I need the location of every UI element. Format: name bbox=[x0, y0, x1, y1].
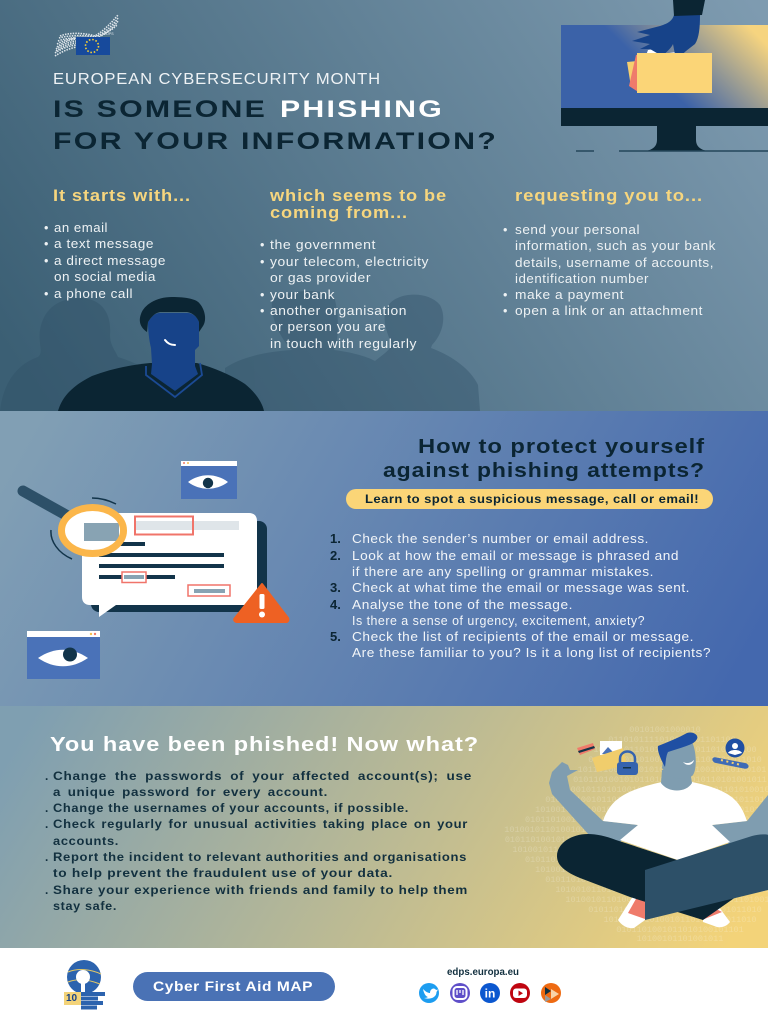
profile badge and password bbox=[713, 738, 748, 768]
list: requests: • bbox=[503, 304, 508, 318]
illustration: man in foreground bbox=[58, 297, 264, 411]
icon: linkedin: in bbox=[485, 986, 495, 1000]
list: what to do: . bbox=[45, 850, 49, 864]
list: channels: a text message bbox=[54, 237, 154, 251]
list: senders: your telecom, electricity bbox=[270, 255, 429, 269]
heading: how to protect: against phishing attempts? bbox=[383, 459, 705, 482]
list: requests: details, username of accounts, bbox=[515, 256, 714, 270]
list: requests: make a payment bbox=[515, 288, 624, 302]
list: channels: an email bbox=[54, 221, 108, 235]
list: what to do: . bbox=[45, 769, 49, 783]
numbered list: protection steps: Analyse the tone of the message. bbox=[352, 598, 573, 612]
icon: peertube bbox=[541, 983, 561, 1003]
icon: twitter bbox=[419, 983, 439, 1003]
arm right bbox=[712, 795, 768, 845]
decoration: binary cloud: 0110101111010010101101100 bbox=[608, 735, 736, 745]
decoration: binary cloud: 0101101001011010100101101001011010100101101001011 bbox=[525, 815, 768, 825]
icon: warning triangle bbox=[234, 584, 288, 622]
heading: how to protect: How to protect yourself bbox=[418, 435, 705, 458]
numbered list: protection steps bbox=[330, 531, 711, 660]
decoration: binary cloud: 0101101001011010100101101 bbox=[616, 925, 744, 935]
list: what to do: . bbox=[45, 817, 49, 831]
panel: header background bbox=[0, 0, 768, 411]
list: requests: send your personal bbox=[515, 223, 640, 237]
list: requests bbox=[503, 223, 716, 318]
heading: month: EUROPEAN CYBERSECURITY MONTH bbox=[53, 71, 381, 88]
icon: linkedin bbox=[480, 983, 500, 1003]
numbered list: protection steps: Are these familiar to you? Is it a long list of recipients? bbox=[352, 646, 711, 660]
decoration: binary cloud bbox=[504, 725, 768, 944]
panel: you have been phished background bbox=[0, 706, 768, 948]
list: senders: the government bbox=[270, 238, 376, 252]
column: which seems to be bbox=[260, 187, 447, 351]
decoration: binary cloud: 1011010010110101001011010010110100101 bbox=[578, 765, 766, 775]
list: senders: or gas provider bbox=[270, 271, 371, 285]
shoes bbox=[618, 898, 645, 928]
list: what to do: to help prevent the fraudulent use of your data. bbox=[53, 866, 393, 880]
heading: how to protect bbox=[383, 435, 705, 482]
list: what to do: Change the passwords of your affected account(s); use bbox=[53, 769, 472, 783]
list: channels: • bbox=[44, 254, 49, 268]
list: channels: a direct message bbox=[54, 254, 166, 268]
list: senders: in touch with regularly bbox=[270, 337, 417, 351]
list: what to do: accounts. bbox=[53, 834, 119, 848]
list: senders: • bbox=[260, 304, 265, 318]
numbered list: protection steps: 1. bbox=[330, 531, 341, 546]
list: senders bbox=[260, 238, 429, 351]
title: FOR YOUR INFORMATION? bbox=[53, 128, 498, 155]
logo: EDPS: EDPS bbox=[104, 32, 114, 36]
logo: ECSM 10th anniversary bbox=[64, 960, 105, 1010]
numbered list: protection steps: 4. bbox=[330, 597, 341, 612]
numbered list: protection steps: if there are any spelling or grammar mistakes. bbox=[352, 565, 654, 579]
heading: you have been phished: You have been phished! Now what? bbox=[50, 733, 479, 756]
list: senders: another organisation bbox=[270, 304, 407, 318]
icon: eye window bottom bbox=[27, 631, 100, 679]
list: senders: • bbox=[260, 255, 265, 269]
button: Cyber First Aid MAP: Cyber First Aid MAP bbox=[153, 978, 313, 994]
icon: mastodon bbox=[450, 983, 470, 1003]
list: what to do: Change the usernames of your accounts, if possible. bbox=[53, 801, 409, 815]
list: requests: open a link or an attachment bbox=[515, 304, 703, 318]
panel: how to protect yourself background bbox=[0, 411, 768, 706]
list: requests: information, such as your bank bbox=[515, 239, 716, 253]
list: what to do: Check regularly for unusual activities taking place on your bbox=[53, 817, 468, 831]
numbered list: protection steps: Look at how the email or message is phrased and bbox=[352, 549, 679, 563]
front leg bbox=[645, 834, 768, 920]
logo: EDPS bbox=[55, 15, 118, 56]
list: what to do: stay safe. bbox=[53, 899, 117, 913]
decoration: binary cloud: 10100101101011101001011010110100 bbox=[593, 745, 757, 755]
list: what to do: Share your experience with friends and family to help them bbox=[53, 883, 468, 897]
neck and head bbox=[661, 770, 692, 790]
dark leg bbox=[557, 834, 734, 920]
list: senders: • bbox=[260, 238, 265, 252]
decoration: binary cloud: 10100101101001011010100101101001011010100101101 bbox=[535, 865, 768, 875]
list: what to do: Report the incident to relevant authorities and organisations bbox=[53, 850, 467, 864]
numbered list: protection steps: 3. bbox=[330, 580, 341, 595]
icon: eye window top bbox=[181, 461, 237, 499]
numbered list: protection steps: 5. bbox=[330, 629, 341, 644]
list: channels: • bbox=[44, 287, 49, 301]
decoration: binary cloud: 00101001000010 bbox=[629, 725, 701, 735]
column heading 2 bbox=[269, 187, 447, 222]
illustration: calm man cross-legged bbox=[549, 732, 768, 928]
link: edps.europa.eu: edps.europa.eu bbox=[447, 966, 519, 978]
list: senders: or person you are bbox=[270, 320, 386, 334]
numbered list: protection steps: Check at what time the email or message was sent. bbox=[352, 581, 690, 595]
list: senders: • bbox=[260, 288, 265, 302]
numbered list: protection steps: Check the sender’s number or email address. bbox=[352, 532, 649, 546]
button: Cyber First Aid MAP bbox=[133, 972, 335, 1001]
decoration: binary cloud: 01011010010110101001011010010110101001011010010110100 bbox=[505, 835, 768, 845]
callout: learn to spot: Learn to spot a suspicious message, call or email! bbox=[365, 492, 699, 506]
column: requesting you to bbox=[503, 187, 716, 318]
list: requests: • bbox=[503, 288, 508, 302]
column heading 2: coming from... bbox=[270, 204, 408, 222]
arm left bbox=[549, 762, 638, 842]
list: requests: identification number bbox=[515, 272, 649, 286]
illustration: monitor with hand stealing folder bbox=[561, 0, 768, 151]
list: what to do: a unique password for every account. bbox=[53, 785, 328, 799]
decoration: binary cloud: 101001011010010110101001011010 bbox=[603, 915, 757, 925]
logo: ECSM 10th anniversary: 10 bbox=[66, 993, 78, 1004]
decoration: binary cloud: 010110100101101010010110100101101010010110101 bbox=[545, 875, 768, 885]
column: it starts with bbox=[44, 187, 191, 301]
icon: magnifier over message bbox=[23, 491, 267, 617]
numbered list: protection steps: Is there a sense of urgency, excitement, anxiety? bbox=[352, 614, 645, 628]
decoration: binary cloud: 0101101001011010100101101001011010 bbox=[588, 905, 762, 915]
decoration: binary cloud: 0101101001011010100101101001011010100101101001011 bbox=[525, 855, 768, 865]
shirt bbox=[603, 782, 747, 860]
folder, card and padlock bbox=[577, 741, 638, 775]
list: channels bbox=[44, 221, 166, 301]
decoration: binary cloud: 01011010010101101001011010110101001011 bbox=[573, 775, 767, 785]
title bbox=[53, 96, 498, 155]
column heading 1: It starts with... bbox=[53, 187, 191, 205]
list: requests: • bbox=[503, 223, 508, 237]
icon: youtube bbox=[510, 983, 530, 1003]
list: channels: on social media bbox=[54, 270, 156, 284]
list: what to do: . bbox=[45, 883, 49, 897]
title: PHISHING bbox=[280, 96, 444, 123]
silhouettes: people in background bbox=[0, 291, 480, 411]
list: what to do bbox=[45, 769, 472, 913]
list: what to do: . bbox=[45, 801, 49, 815]
title: IS SOMEONE bbox=[53, 96, 267, 123]
decoration: binary cloud: 10100101101001011 bbox=[637, 934, 723, 944]
list: channels: • bbox=[44, 237, 49, 251]
decoration: binary cloud: 010110100101101010010110100101101010010110101 bbox=[545, 795, 768, 805]
column heading 2: which seems to be bbox=[269, 187, 447, 205]
list: channels: • bbox=[44, 221, 49, 235]
panel: footer bbox=[0, 948, 768, 1024]
list: senders: your bank bbox=[270, 288, 335, 302]
callout: learn to spot bbox=[346, 489, 713, 509]
numbered list: protection steps: 2. bbox=[330, 548, 341, 563]
list: channels: a phone call bbox=[54, 287, 133, 301]
decoration: binary cloud: 10100101101001011010100101101001011010100101101 bbox=[535, 805, 768, 815]
column heading 3: requesting you to... bbox=[515, 187, 703, 205]
numbered list: protection steps: Check the list of recipients of the email or message. bbox=[352, 630, 694, 644]
decoration: binary cloud: 0101101011010010110101101001011010 bbox=[588, 755, 762, 765]
